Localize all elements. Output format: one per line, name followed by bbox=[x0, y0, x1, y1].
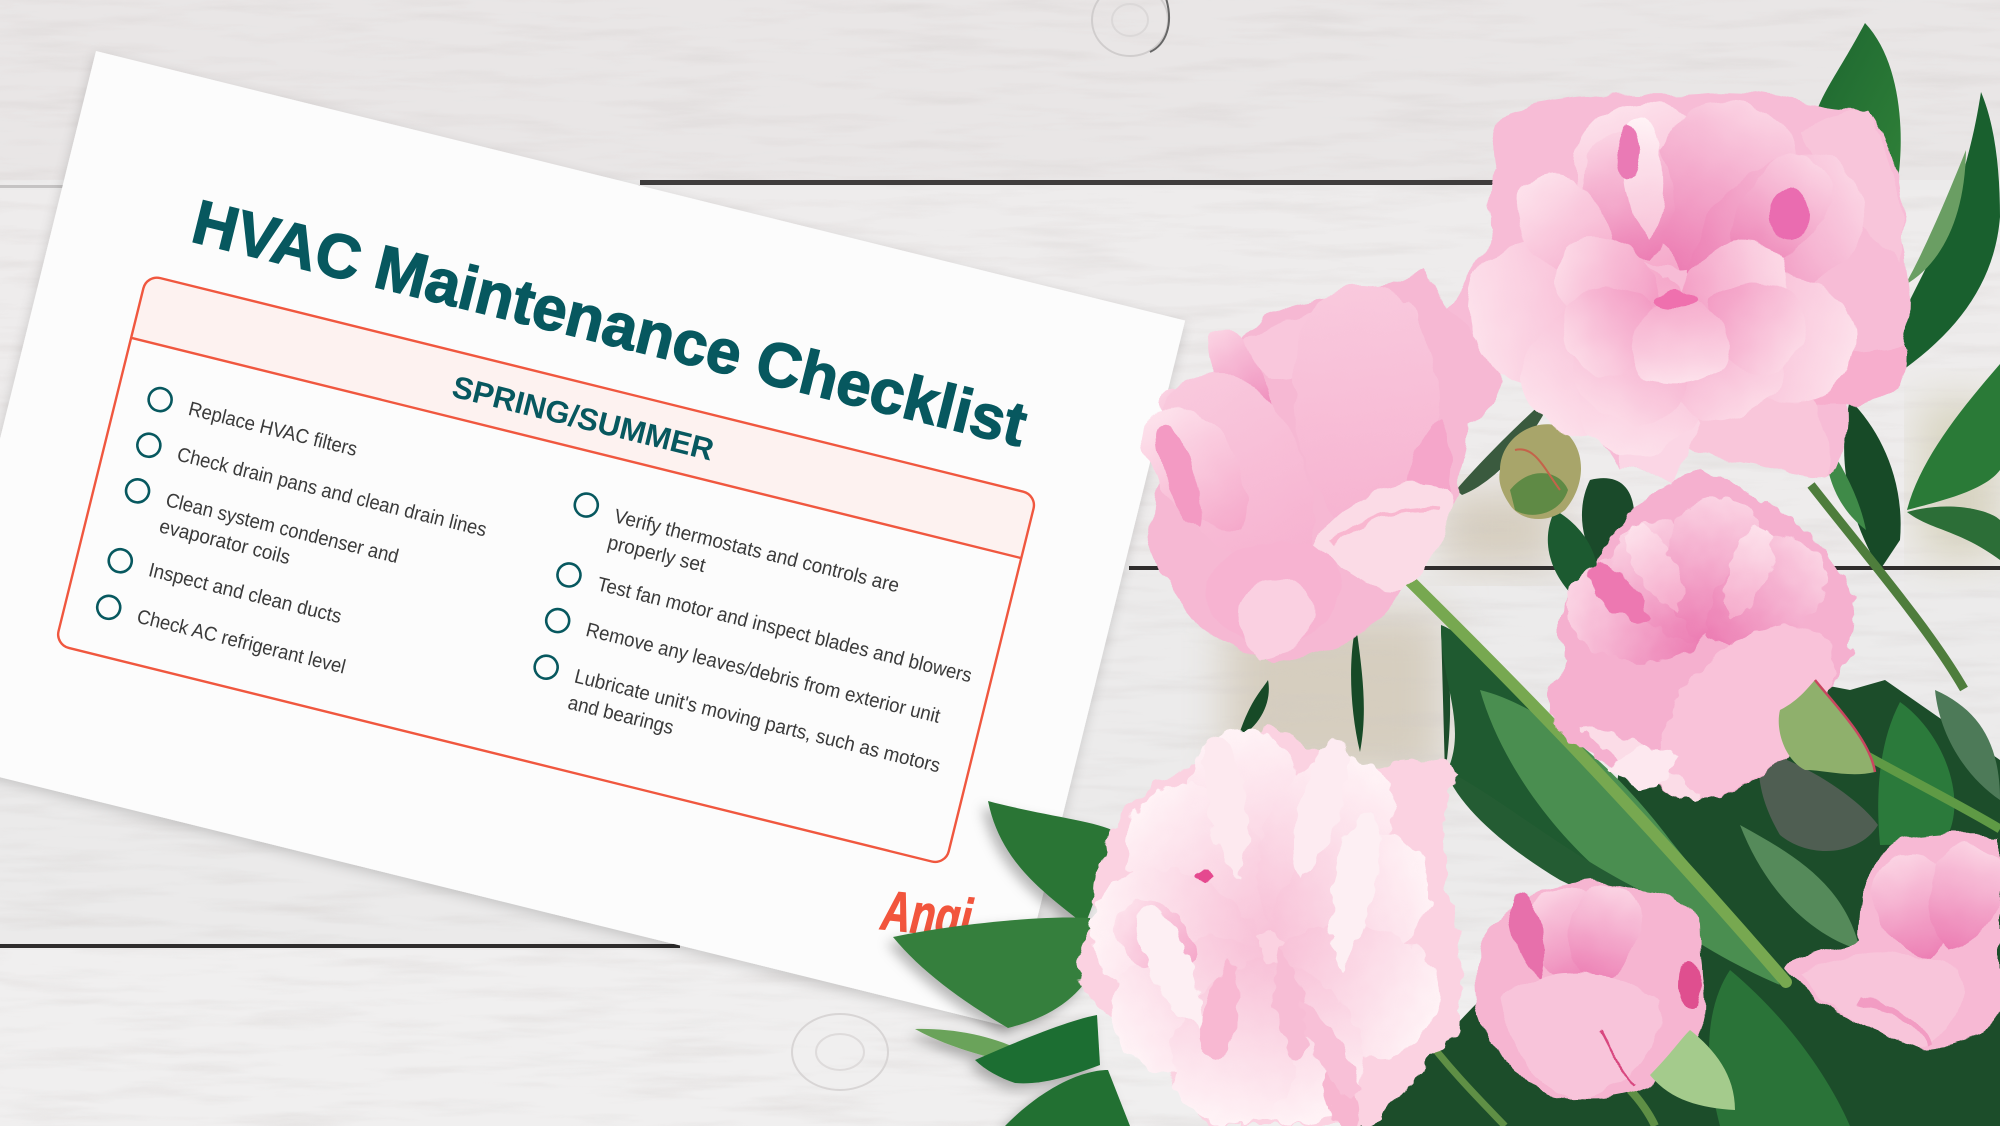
right column checklist: Verify thermostats and controls are bbox=[612, 505, 901, 597]
bud: bottom green bud bbox=[1650, 1030, 1735, 1110]
foliage behind the flowers bbox=[1238, 23, 2000, 1126]
title: HVAC Maintenance Checklist bbox=[186, 188, 1033, 460]
leaf: dark vertical bbox=[1844, 400, 1901, 570]
leaf: right middle bbox=[1907, 364, 2000, 510]
right column checklist: and bearings bbox=[566, 692, 676, 739]
leaf: bottom bbox=[1005, 1070, 1130, 1126]
left column checklist: Check drain pans and clean drain lines bbox=[175, 444, 489, 541]
right column checklist: Lubricate unit's moving parts, such as motors bbox=[572, 666, 942, 777]
leaf: grey-green far right bbox=[1935, 690, 2000, 800]
checklist panel: spring/summer bbox=[55, 275, 1037, 865]
stem: right bbox=[1811, 485, 1964, 689]
stem: bottom bbox=[1420, 1030, 1505, 1126]
leaf: pale strip bbox=[1905, 150, 1966, 285]
right column checklist bbox=[525, 491, 992, 806]
stem: bottom middle bbox=[1630, 1090, 1655, 1126]
leaf: right lower bbox=[1907, 507, 2000, 560]
leaf: middle bbox=[893, 917, 1098, 1028]
flower: right middle peony bbox=[1548, 470, 1855, 800]
leaf: medium right bbox=[1878, 702, 1954, 845]
dark foliage mass bbox=[1360, 625, 2000, 1126]
bud: right green bud bbox=[1779, 680, 1875, 774]
left column checklist bbox=[94, 386, 501, 704]
left column checklist: Replace HVAC filters bbox=[186, 398, 359, 461]
leaf: thin blade near bud bbox=[1456, 390, 1555, 495]
leaves over the card corner bbox=[893, 801, 1130, 1126]
panel header band bbox=[131, 275, 1037, 558]
right column checklist: Test fan motor and inspect blades and blowers bbox=[595, 573, 974, 687]
flower: bottom pale peony bbox=[1078, 719, 1462, 1126]
leaf: upper bbox=[988, 801, 1112, 925]
right column checklist: Remove any leaves/debris from exterior unit bbox=[584, 619, 943, 728]
flower: left middle peony bbox=[1124, 272, 1502, 672]
left column checklist: Check AC refrigerant level bbox=[135, 606, 348, 679]
leaf: lower dark bbox=[975, 1015, 1100, 1083]
leaf: lower pale bbox=[915, 1029, 1020, 1060]
left column checklist: Clean system condenser and bbox=[164, 489, 401, 568]
stem: right lower bbox=[1862, 753, 2000, 829]
leaf: lower right band bbox=[1709, 970, 1850, 1126]
logo: Angi: Angi bbox=[877, 878, 976, 950]
leaf: dark central bbox=[1582, 478, 1634, 590]
leaf: long right bbox=[1895, 92, 2000, 372]
right column checklist: properly set bbox=[605, 532, 708, 577]
leaf: top bbox=[1815, 23, 1901, 180]
bud: upper green bud bbox=[1499, 424, 1581, 519]
leaf: big mid green along stem bbox=[1480, 690, 1780, 985]
leaf: small dark bbox=[1238, 680, 1269, 738]
leaf: dark oval bbox=[1548, 510, 1598, 610]
panel outline bbox=[55, 275, 1037, 865]
leaf: dark along stem bbox=[1441, 625, 1720, 940]
section heading: SPRING/SUMMER bbox=[449, 369, 717, 467]
flower: right edge peony bbox=[1783, 834, 2000, 1050]
flower: bottom bud peony bbox=[1474, 877, 1706, 1098]
leaf: lower mid green bbox=[1445, 770, 1644, 905]
leaf: long thin dark bbox=[1351, 625, 1364, 752]
leaf: dark grey-green bbox=[1759, 750, 1878, 851]
stem: long bright bbox=[1403, 574, 1786, 982]
checklist card bbox=[0, 51, 1185, 1027]
left column checklist: evaporator coils bbox=[157, 516, 292, 569]
flower: top right peony bbox=[1450, 78, 1909, 486]
leaf: mid green beside bud bbox=[1825, 440, 1866, 530]
leaf: mid green lower bbox=[1740, 825, 1860, 950]
left column checklist: Inspect and clean ducts bbox=[146, 559, 344, 628]
